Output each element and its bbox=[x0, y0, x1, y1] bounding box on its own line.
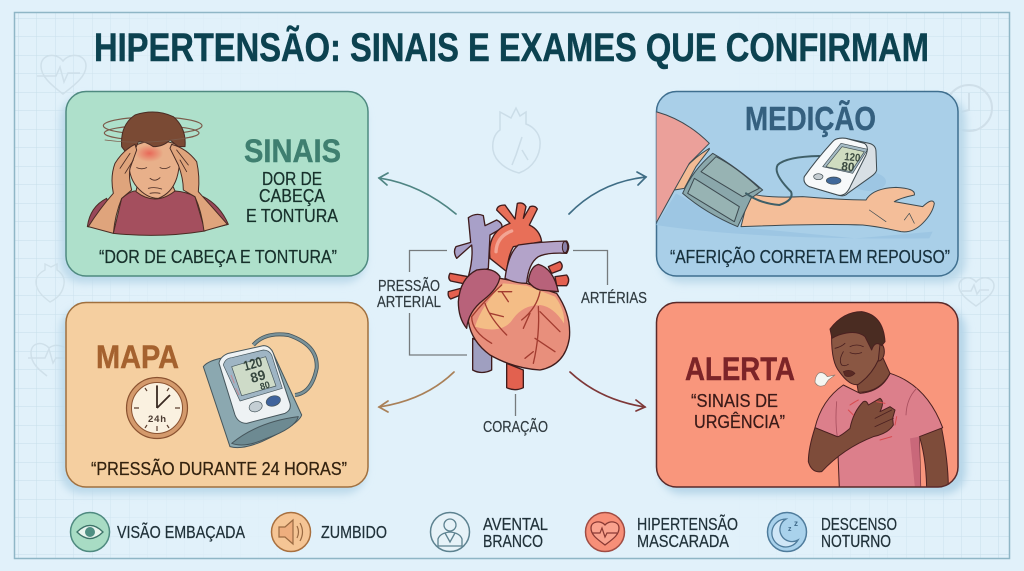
legend: hipertensão mascarada: HIPERTENSÃO bbox=[637, 513, 738, 534]
legend: avental branco: AVENTAL bbox=[483, 514, 548, 534]
legend: descenso noturno bbox=[768, 512, 897, 552]
icon: 24h clock: 24h bbox=[148, 414, 166, 425]
label: pressão arterial: PRESSÃO bbox=[378, 278, 440, 295]
legend: hipertensão mascarada: MASCARADA bbox=[637, 531, 729, 551]
legend: avental branco: BRANCO bbox=[483, 531, 543, 551]
legend: zumbido: ZUMBIDO bbox=[321, 522, 387, 542]
text: dor de cabeça e tontura: DOR DE bbox=[262, 169, 322, 189]
monitor reading bbox=[241, 353, 271, 393]
ghost icon: heart pulse top left bbox=[37, 55, 86, 94]
ghost icon: heart top center bbox=[493, 108, 540, 173]
legend: avental branco bbox=[430, 512, 548, 552]
heading: mapa: MAPA bbox=[96, 339, 179, 375]
legend: zumbido bbox=[272, 512, 387, 552]
legend: hipertensão mascarada bbox=[586, 512, 738, 552]
icon: 24h clock bbox=[126, 378, 188, 438]
legend: descenso noturno: DESCENSO bbox=[821, 514, 897, 534]
legend: visão embaçada: VISÃO EMBAÇADA bbox=[117, 521, 245, 542]
illustration: wrist blood pressure monitor bbox=[203, 334, 317, 448]
label: coração: CORAÇÃO bbox=[483, 419, 548, 436]
legend: descenso noturno: NOTURNO bbox=[821, 531, 891, 551]
monitor reading bbox=[841, 151, 861, 174]
panel border: alerta bbox=[656, 302, 958, 487]
illustration: person with headache bbox=[87, 112, 228, 235]
label: pressão arterial: ARTERIAL bbox=[377, 294, 441, 311]
caption: sinais de urgência bbox=[691, 390, 785, 432]
caption: sinais de urgência: “SINAIS DE bbox=[691, 390, 778, 411]
panel: alerta bbox=[656, 302, 966, 494]
monitor reading: 120 bbox=[241, 353, 264, 374]
text: dor de cabeça e tontura bbox=[246, 169, 338, 226]
monitor reading: 80 bbox=[259, 380, 271, 393]
caption: mapa: “PRESSÃO DURANTE 24 HORAS” bbox=[91, 458, 347, 479]
panel: sinais bbox=[60, 92, 368, 283]
panel: mapa bbox=[60, 302, 368, 494]
illustration: arm with blood pressure cuff and monitor bbox=[656, 112, 934, 238]
label: artérias: ARTÉRIAS bbox=[581, 290, 647, 307]
monitor reading: 120 bbox=[844, 151, 861, 165]
legend: descenso noturno: z bbox=[788, 526, 792, 533]
ghost icon: heart pulse left lower bbox=[28, 344, 66, 376]
ghost icon: clock top right bbox=[946, 85, 992, 131]
text: dor de cabeça e tontura: CABEÇA bbox=[259, 186, 325, 206]
legend: visão embaçada bbox=[70, 512, 245, 552]
legend: descenso noturno: z bbox=[794, 519, 798, 528]
heading: medição: MEDIÇÃO bbox=[745, 100, 876, 137]
arrow: center to medição bbox=[569, 172, 646, 214]
text: dor de cabeça e tontura: E TONTURA bbox=[246, 206, 338, 226]
arrow: center to mapa bbox=[379, 372, 454, 412]
illustration: man with chest pain bbox=[808, 312, 948, 488]
caption: sinais: “DOR DE CABEÇA E TONTURA” bbox=[99, 246, 337, 267]
heading: alerta: ALERTA bbox=[685, 351, 795, 387]
caption: medição: “AFERIÇÃO CORRETA EM REPOUSO” bbox=[670, 246, 950, 267]
illustration: heart bbox=[448, 203, 570, 390]
arrow: center to sinais bbox=[379, 173, 456, 214]
ghost icon: heart pulse right bbox=[959, 278, 994, 306]
heading: sinais: SINAIS bbox=[244, 133, 341, 169]
panel: medição bbox=[656, 92, 966, 283]
arrow: center to alerta bbox=[570, 372, 645, 411]
monitor reading: 89 bbox=[248, 366, 267, 386]
ghost icon: heart left middle bbox=[36, 264, 64, 302]
monitor reading: 80 bbox=[841, 159, 855, 174]
leader lines bbox=[410, 250, 608, 416]
label: pressão arterial bbox=[377, 278, 441, 311]
caption: sinais de urgência: URGÊNCIA” bbox=[694, 411, 785, 432]
